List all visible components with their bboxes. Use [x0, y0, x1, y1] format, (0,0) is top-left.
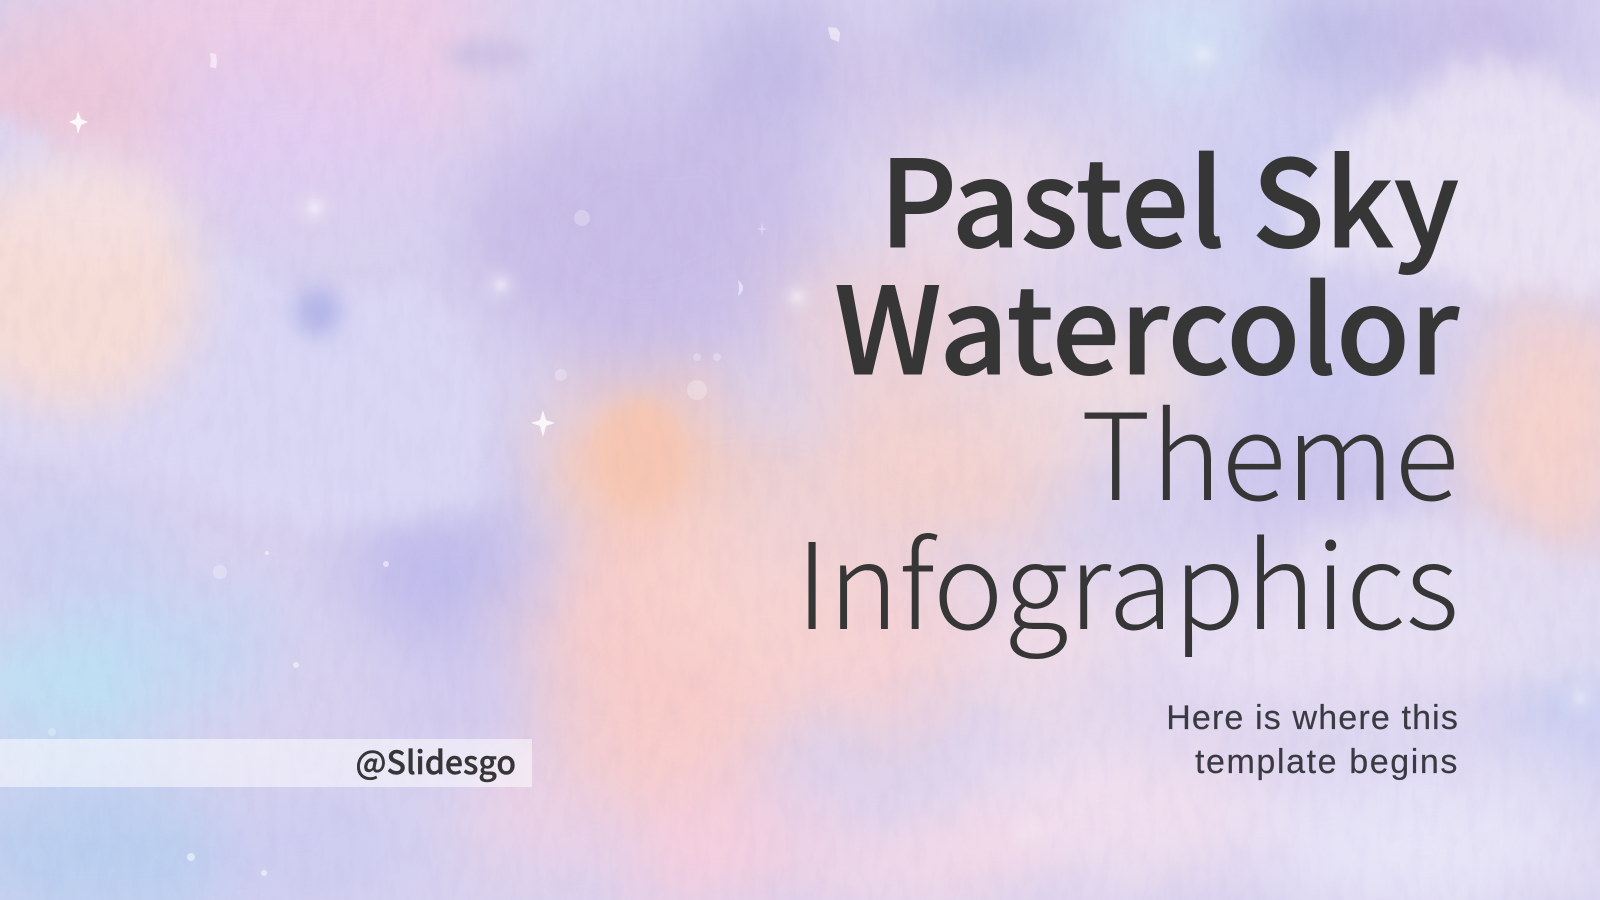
darker pigment spots	[294, 41, 685, 510]
title line: Infographics: Infographics	[796, 492, 1459, 664]
title line: Watercolor: Watercolor	[834, 235, 1459, 409]
title line: Pastel Sky: Pastel Sky	[879, 108, 1459, 282]
handle text: @Slidesgo	[355, 738, 516, 784]
subtitle	[1166, 699, 1459, 781]
handle banner	[0, 739, 532, 787]
subtitle: template begins	[1195, 743, 1459, 781]
peach cloud glows	[0, 155, 860, 660]
clouds	[0, 60, 1600, 680]
title	[796, 108, 1460, 664]
subtitle: Here is where this	[1166, 699, 1459, 737]
title line: Theme: Theme	[1081, 361, 1459, 535]
